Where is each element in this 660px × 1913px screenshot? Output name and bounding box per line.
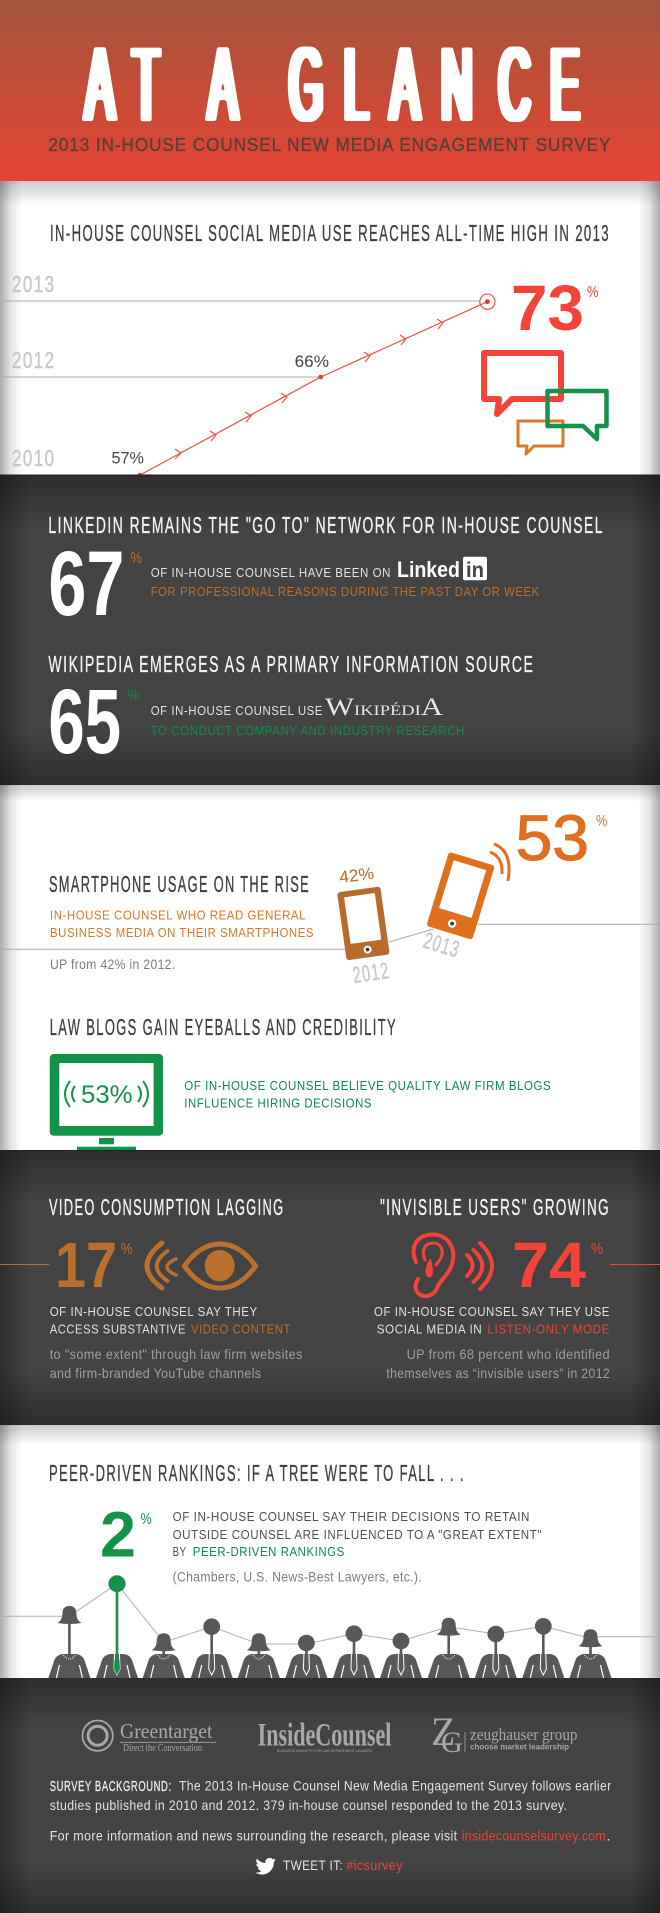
text: Wikipedia stat description <box>151 704 465 738</box>
text: smartphone description: BUSINESS MEDIA ON THEIR SMARTPHONES <box>50 926 314 940</box>
logo: Zeughauser Group: G <box>441 1726 463 1759</box>
text: survey background <box>50 1778 611 1813</box>
text: law blogs description: OF IN-HOUSE COUNSEL BELIEVE QUALITY LAW FIRM BLOGS <box>184 1079 551 1093</box>
text: rankings description: (Chambers, U.S. News-Best Lawyers, etc.). <box>173 1569 422 1585</box>
stat: 73 percent: 73 <box>511 272 584 344</box>
heading: video consumption: VIDEO CONSUMPTION LAGGING <box>49 1194 284 1220</box>
panel: peer-driven rankings <box>0 1425 660 1678</box>
text: rankings description: BY <box>173 1545 187 1559</box>
text: smartphone description: UP from 42% in 2012. <box>50 956 176 972</box>
panel: LinkedIn and Wikipedia <box>0 474 660 785</box>
text: invisible users description <box>374 1305 610 1381</box>
panel: social media use <box>0 181 660 477</box>
icon: phone 2012 <box>337 886 390 960</box>
stat: 65 percent: 65 <box>48 671 121 773</box>
title: AT A GLANCE <box>85 26 579 142</box>
panel: header banner <box>0 0 660 181</box>
logo: LinkedIn: in <box>466 559 484 582</box>
line chart: social media use by year <box>0 271 495 477</box>
stat: 74 percent: % <box>591 1241 603 1258</box>
logo: InsideCounsel <box>258 1718 391 1754</box>
text: invisible users description: OF IN-HOUSE COUNSEL SAY THEY USE <box>374 1305 610 1319</box>
text: invisible users description: UP from 68 percent who identified <box>407 1346 610 1362</box>
text: more information: For more information and news surrounding the research, please visit <box>50 1827 457 1843</box>
label: 2013: 2013 <box>421 927 464 963</box>
chart: row of people <box>0 1575 660 1678</box>
text: video description: VIDEO CONTENT <box>191 1323 291 1337</box>
stat: 65 percent: % <box>128 688 139 705</box>
heading: smartphone usage: SMARTPHONE USAGE ON THE RISE <box>49 871 310 897</box>
stat: 67 percent: 67 <box>48 533 124 635</box>
text: Wikipedia stat description: TO CONDUCT COMPANY AND INDUSTRY RESEARCH <box>151 724 465 738</box>
subtitle: 2013 IN-HOUSE COUNSEL NEW MEDIA ENGAGEMENT SURVEY <box>48 135 611 155</box>
icon: monitor with 53 percent: 53% <box>81 1081 133 1109</box>
logo: LinkedIn: Linked <box>397 557 460 582</box>
logo: Greentarget: Greentarget <box>120 1719 213 1743</box>
text: Wikipedia stat description: OF IN-HOUSE COUNSEL USE <box>151 704 323 718</box>
text: LinkedIn stat description <box>151 566 540 599</box>
line chart: social media use by year: 66% <box>295 353 329 371</box>
stat: 17 percent: 17 <box>55 1229 117 1301</box>
text: law blogs description: INFLUENCE HIRING DECISIONS <box>184 1097 372 1111</box>
text: invisible users description: LISTEN-ONLY MODE <box>487 1323 610 1337</box>
text: invisible users description: SOCIAL MEDIA IN <box>377 1323 482 1337</box>
icon: eye with waves <box>147 1243 256 1288</box>
text: invisible users description: themselves as “invisible users” in 2012 <box>386 1365 610 1381</box>
icon: phone signal <box>490 844 509 881</box>
stat: 73 percent: % <box>587 284 598 301</box>
text: law blogs description <box>184 1079 551 1111</box>
panel: smartphones and law blogs <box>0 785 660 1150</box>
text: video description <box>50 1305 303 1381</box>
logo: Greentarget <box>82 1719 216 1754</box>
stat: 74 percent: 74 <box>512 1229 586 1301</box>
logo: InsideCounsel: InsideCounsel <box>258 1718 391 1754</box>
text: rankings description: PEER-DRIVEN RANKINGS <box>193 1545 345 1559</box>
label: 42 percent: 42% <box>338 864 375 887</box>
stat: 2 percent <box>100 1499 152 1571</box>
text: smartphone description <box>50 908 314 972</box>
stat: 2 percent: 2 <box>100 1499 136 1571</box>
text: rankings description <box>173 1510 542 1585</box>
line chart: social media use by year: 2012 <box>12 347 56 373</box>
logo: Zeughauser Group <box>431 1709 578 1759</box>
text: LinkedIn stat description: OF IN-HOUSE COUNSEL HAVE BEEN ON <box>151 566 391 580</box>
logo: Wikipedia: W IKIPÉDI A <box>325 694 443 721</box>
text: survey background: SURVEY BACKGROUND: <box>50 1778 172 1795</box>
text: tweet it <box>283 1857 403 1873</box>
text: video description: to "some extent" through law firm websites <box>50 1346 303 1362</box>
text: rankings description: OUTSIDE COUNSEL ARE INFLUENCED TO A "GREAT EXTENT" <box>173 1528 542 1542</box>
text: smartphone description: IN-HOUSE COUNSEL WHO READ GENERAL <box>50 908 306 922</box>
text: tweet it: #icsurvey <box>346 1857 403 1873</box>
logo: Zeughauser Group: zeughauser group <box>470 1725 578 1744</box>
line chart: social media use by year: 2013 <box>12 271 56 297</box>
text: tweet it: TWEET IT: <box>283 1857 343 1873</box>
text: more information: insidecounselsurvey.com <box>462 1827 606 1843</box>
stat: 67 percent: % <box>130 550 142 567</box>
logo: InsideCounsel: BUSINESS INSIGHTS FOR LAW DEPARTMENT LEADERS <box>277 1749 373 1753</box>
stat: 53 percent: 53 <box>516 802 589 874</box>
icon: twitter bird <box>256 1858 276 1874</box>
text: rankings description: OF IN-HOUSE COUNSEL SAY THEIR DECISIONS TO RETAIN <box>173 1510 530 1524</box>
logo: Zeughauser Group: choose market leadership <box>470 1742 569 1752</box>
icon: speech bubbles <box>484 353 606 454</box>
line chart: social media use by year: 57% <box>112 450 144 468</box>
stat: 53 percent: % <box>596 813 607 830</box>
logo: Greentarget: Direct the Conversation <box>123 1743 202 1754</box>
icon: phone 2013 <box>426 852 495 940</box>
text: video description: and firm-branded YouTube channels <box>50 1365 261 1381</box>
connector line right <box>610 1264 660 1266</box>
icon: monitor with 53 percent <box>50 1054 163 1150</box>
text: LinkedIn stat description: FOR PROFESSIONAL REASONS DURING THE PAST DAY OR WEEK <box>151 585 540 599</box>
stat: 17 percent: % <box>121 1241 133 1258</box>
trend line <box>0 924 660 949</box>
text: survey background: studies published in 2010 and 2012. 379 in-house counsel responded to the 2013 survey. <box>50 1797 567 1813</box>
logo: Zeughauser Group: Z <box>431 1709 455 1754</box>
text: video description: ACCESS SUBSTANTIVE <box>50 1323 186 1337</box>
panel: video and invisible users <box>0 1150 660 1425</box>
text: video description: OF IN-HOUSE COUNSEL SAY THEY <box>50 1305 258 1319</box>
stat: 2 percent: % <box>141 1511 152 1528</box>
text: more information: . <box>606 1827 611 1843</box>
label: 2012: 2012 <box>351 957 391 988</box>
panel: footer <box>0 1678 660 1913</box>
connector lines <box>0 1264 49 1266</box>
icon: ear with waves <box>414 1234 492 1296</box>
line chart: social media use by year: 2010 <box>12 445 56 471</box>
